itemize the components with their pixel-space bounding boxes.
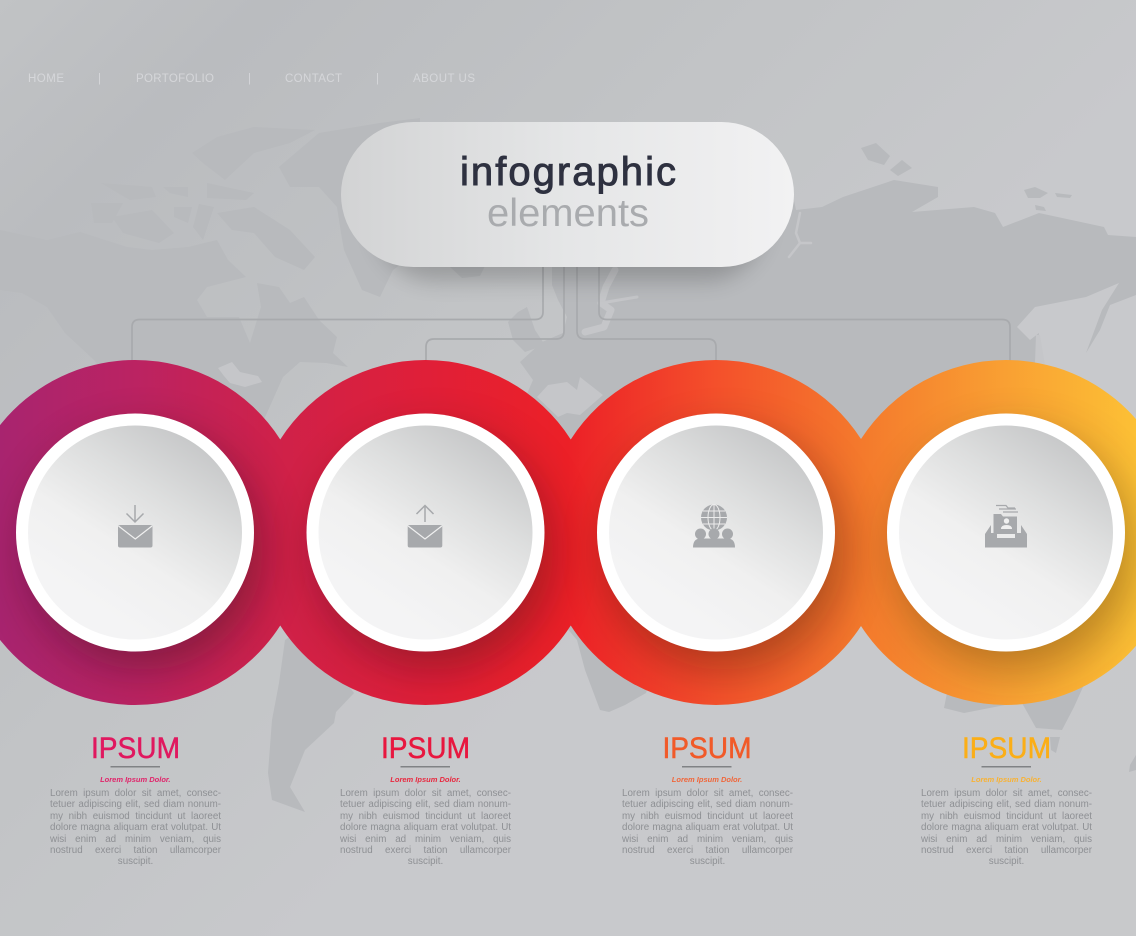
- step 1 body text: my nibh euismod tincidunt ut laoreet: [50, 811, 221, 822]
- step 1 heading: [91, 732, 180, 784]
- navigation menu: [28, 73, 475, 85]
- navigation menu: CONTACT: [285, 73, 342, 85]
- step 4 body text: tetuer adipiscing elit, sed diam nonum-: [921, 799, 1092, 810]
- step 1 body text: tetuer adipiscing elit, sed diam nonum-: [50, 799, 221, 810]
- navigation menu: |: [98, 73, 101, 85]
- step 4 body text: dolore magna aliquam erat volutpat. Ut: [921, 822, 1092, 833]
- connector lines: [132, 262, 1010, 362]
- title pill: [341, 122, 794, 281]
- navigation menu: HOME: [28, 73, 64, 85]
- step 2 body text: [340, 788, 511, 867]
- navigation menu: |: [376, 73, 379, 85]
- step 1 heading: Lorem Ipsum Dolor.: [100, 775, 171, 784]
- step 3 heading: Lorem Ipsum Dolor.: [672, 775, 742, 784]
- step 2 body text: tetuer adipiscing elit, sed diam nonum-: [340, 799, 511, 810]
- step 4 heading: Lorem Ipsum Dolor.: [971, 775, 1042, 784]
- step 3 heading: IPSUM: [662, 732, 752, 765]
- step 2 body text: dolore magna aliquam erat volutpat. Ut: [340, 822, 511, 833]
- step 3 body text: Lorem ipsum dolor sit amet, consec-: [622, 788, 793, 799]
- step 3 heading: [662, 732, 752, 784]
- step 1 body text: suscipit.: [118, 856, 153, 867]
- icon: globe and people: [693, 504, 735, 548]
- step 1 body text: Lorem ipsum dolor sit amet, consec-: [50, 788, 221, 799]
- step 4 heading: [962, 732, 1051, 784]
- icon: upload mail: [408, 506, 442, 548]
- step 3 body text: suscipit.: [690, 856, 725, 867]
- navigation menu: |: [248, 73, 251, 85]
- step 3 body text: my nibh euismod tincidunt ut laoreet: [622, 811, 793, 822]
- step 3 body text: dolore magna aliquam erat volutpat. Ut: [622, 822, 793, 833]
- step 4 body text: my nibh euismod tincidunt ut laoreet: [921, 811, 1092, 822]
- step 2 body text: wisi enim ad minim veniam, quis: [340, 834, 511, 845]
- step 2 heading: IPSUM: [381, 732, 470, 765]
- step 4 body text: Lorem ipsum dolor sit amet, consec-: [921, 788, 1092, 799]
- step 3 body text: tetuer adipiscing elit, sed diam nonum-: [622, 799, 793, 810]
- step 3 body text: wisi enim ad minim veniam, quis: [622, 834, 793, 845]
- step 2 heading: Lorem Ipsum Dolor.: [390, 775, 461, 784]
- step 3 body text: [622, 788, 793, 867]
- title: infographic: infographic: [460, 150, 676, 194]
- navigation menu: ABOUT US: [413, 73, 475, 85]
- step 2 body text: Lorem ipsum dolor sit amet, consec-: [340, 788, 511, 799]
- subtitle: elements: elements: [487, 192, 649, 235]
- step 4 disc with archive tray icon: [887, 414, 1125, 652]
- step 1 body text: [50, 788, 221, 867]
- step 2 heading: [381, 732, 470, 784]
- step 2 body text: suscipit.: [408, 856, 443, 867]
- step 1 heading: IPSUM: [91, 732, 180, 765]
- icon: download mail: [118, 505, 152, 548]
- step 1 body text: nostrud exerci tation ullamcorper: [50, 845, 221, 856]
- icon: archive tray: [985, 506, 1027, 548]
- gradient ring chain: [0, 350, 1136, 715]
- step 3 body text: nostrud exerci tation ullamcorper: [622, 845, 793, 856]
- step 4 body text: nostrud exerci tation ullamcorper: [921, 845, 1092, 856]
- navigation menu: PORTOFOLIO: [136, 73, 214, 85]
- step 2 body text: my nibh euismod tincidunt ut laoreet: [340, 811, 511, 822]
- step 2 body text: nostrud exerci tation ullamcorper: [340, 845, 511, 856]
- step 1 body text: dolore magna aliquam erat volutpat. Ut: [50, 822, 221, 833]
- step 4 body text: wisi enim ad minim veniam, quis: [921, 834, 1092, 845]
- step 1 body text: wisi enim ad minim veniam, quis: [50, 834, 221, 845]
- world map background: [0, 118, 1136, 812]
- step 2 disc with upload mail icon: [306, 414, 544, 652]
- step 4 body text: [921, 788, 1092, 867]
- step 4 body text: suscipit.: [989, 856, 1024, 867]
- step 3 disc with globe and people icon: [597, 414, 835, 652]
- step 4 heading: IPSUM: [962, 732, 1051, 765]
- step 1 disc with download mail icon: [16, 414, 254, 652]
